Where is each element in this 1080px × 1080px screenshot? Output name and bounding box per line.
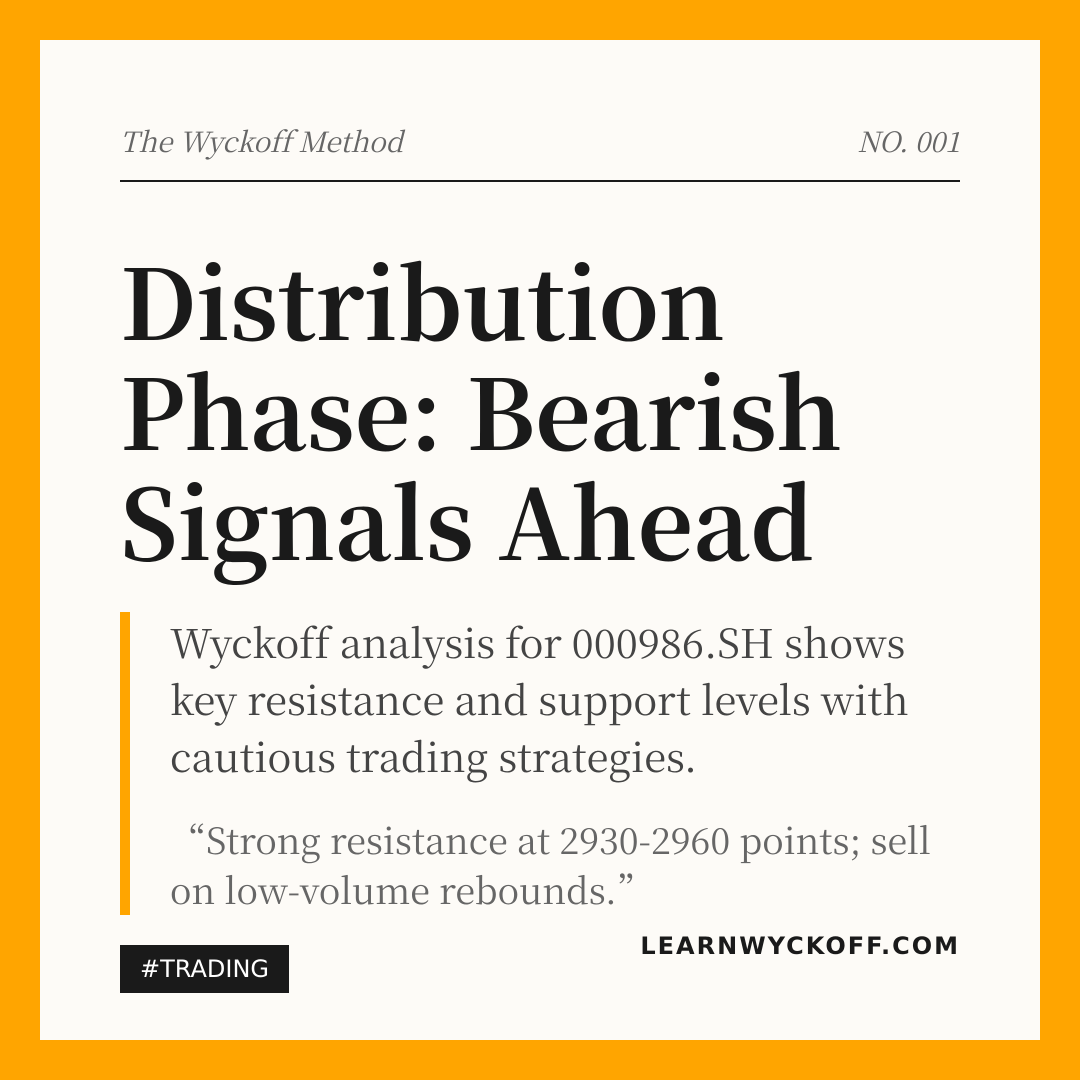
header rule	[120, 180, 960, 182]
title: Phase: Bearish	[120, 338, 842, 478]
summary text: Wyckoff analysis for 000986.SH shows	[170, 613, 906, 670]
title	[120, 228, 842, 588]
header: issue number: NO. 001	[857, 121, 960, 161]
pull quote	[170, 814, 931, 915]
tag: trading: #TRADING	[140, 955, 269, 983]
summary text: key resistance and support levels with	[170, 670, 909, 727]
summary text	[170, 613, 909, 784]
title: Signals Ahead	[120, 448, 815, 588]
pull quote: “Strong resistance at 2930-2960 points; sell	[170, 814, 931, 865]
header: series name: The Wyckoff Method	[120, 121, 403, 161]
title: Distribution	[120, 228, 725, 368]
pull quote: on low-volume rebounds.”	[170, 864, 653, 915]
summary text: cautious trading strategies.	[170, 727, 697, 784]
website: LEARNWYCKOFF.COM	[640, 932, 960, 960]
tag: trading	[120, 945, 289, 993]
accent bar	[120, 612, 130, 915]
